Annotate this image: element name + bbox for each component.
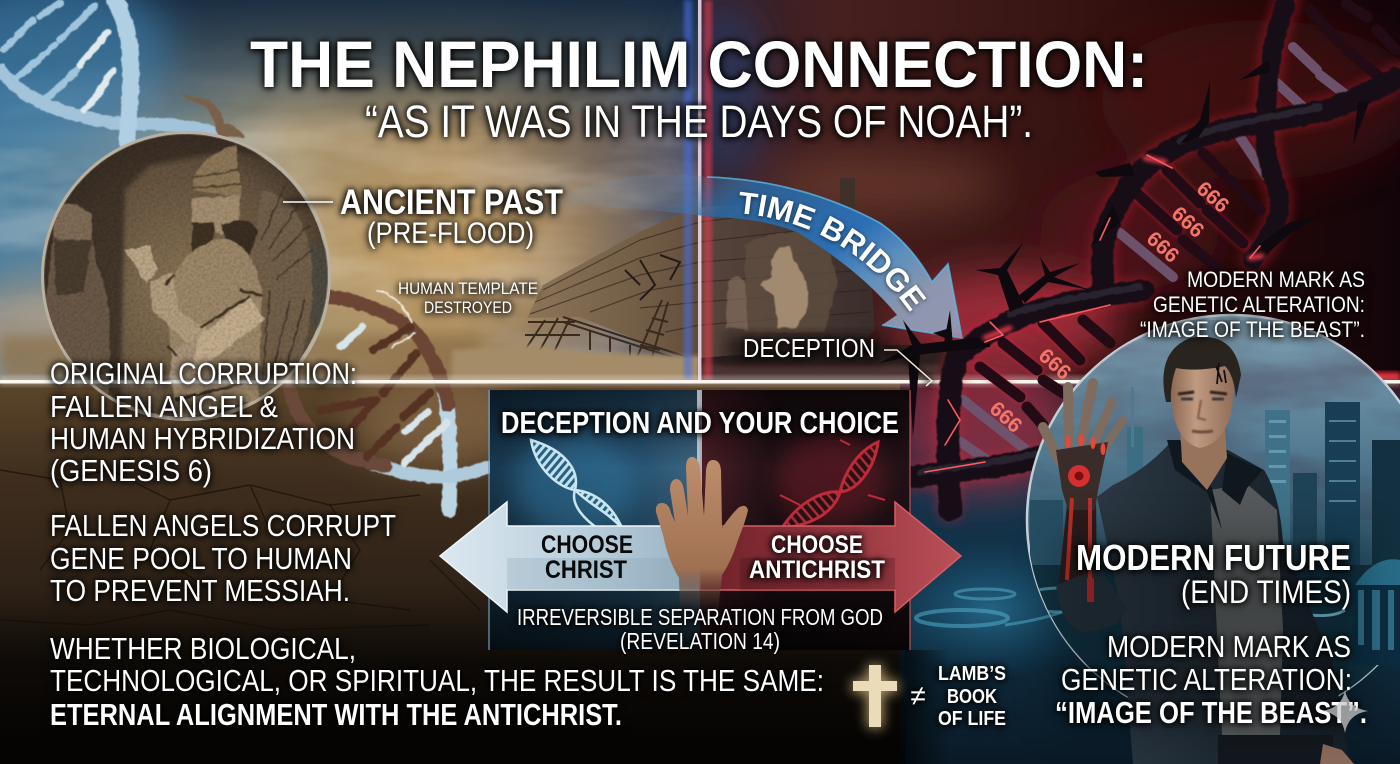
icon: raised hand xyxy=(656,457,748,612)
text block: eternal alignment xyxy=(50,631,824,732)
666 labels: 666 xyxy=(985,397,1026,438)
ark relief carving xyxy=(726,232,838,332)
label: modern mark top right: “IMAGE OF THE BEAST”. xyxy=(1140,317,1365,342)
forearm xyxy=(1058,495,1097,590)
thorns xyxy=(880,60,1370,437)
eyes, brows, nose and mouth xyxy=(1178,392,1227,432)
text block: fallen angels xyxy=(50,508,396,608)
666 labels: 666 xyxy=(1167,202,1208,243)
text block: original corruption: FALLEN ANGEL & xyxy=(50,389,278,424)
skyline buildings xyxy=(1030,387,1360,590)
cracked desert ground xyxy=(0,470,480,630)
red crack highlights xyxy=(925,155,1260,472)
not equal sign: ≠ xyxy=(910,680,926,711)
label: lamb's book of life: BOOK xyxy=(947,686,997,708)
text block: original corruption: (GENESIS 6) xyxy=(50,453,212,488)
label: modern mark top right xyxy=(1140,267,1365,342)
antichrist label: CHOOSE xyxy=(771,531,863,559)
label: human template destroyed: HUMAN TEMPLATE xyxy=(398,279,538,298)
subtitle: “AS IT WAS IN THE DAYS OF NOAH”. xyxy=(365,96,1033,147)
label: human template destroyed xyxy=(398,279,538,317)
horizontal divider line xyxy=(0,372,1400,386)
man with mark xyxy=(1043,337,1354,764)
text: irreversible separation xyxy=(517,604,883,654)
collar xyxy=(1167,440,1263,530)
text block: eternal alignment: ETERNAL ALIGNMENT WITH THE ANTICHRIST. xyxy=(50,697,622,732)
text block: modern mark bottom xyxy=(1055,629,1367,730)
antichrist label xyxy=(749,531,885,584)
center panel: deception and your choice xyxy=(488,390,911,650)
icon: glowing cross xyxy=(852,665,898,728)
text block: eternal alignment: TECHNOLOGICAL, OR SPIRITUAL, THE RESULT IS THE SAME: xyxy=(50,663,824,698)
666 labels: 666 xyxy=(1142,227,1183,268)
strand sheen xyxy=(920,107,1320,472)
christ label: CHRIST xyxy=(545,556,627,584)
text: irreversible separation: IRREVERSIBLE SEPARATION FROM GOD xyxy=(517,604,883,630)
label: deception: DECEPTION xyxy=(743,333,875,363)
strands xyxy=(913,6,1395,510)
title: THE NEPHILIM CONNECTION: xyxy=(250,27,1148,101)
horizon desert strip xyxy=(452,345,700,382)
heading: ancient past: (PRE-FLOOD) xyxy=(367,217,534,250)
bionic hand xyxy=(1043,383,1123,602)
choice arrow: Christ xyxy=(440,502,720,612)
sleeve xyxy=(1056,568,1128,632)
heading: modern future: (END TIMES) xyxy=(1181,574,1351,610)
hair xyxy=(1163,337,1241,402)
text block: eternal alignment: WHETHER BIOLOGICAL, xyxy=(50,631,356,666)
city lights outside circle xyxy=(916,440,1400,665)
heading: ancient past: ANCIENT PAST xyxy=(340,183,563,222)
ark scaffolding and ladder xyxy=(525,300,687,358)
text block: original corruption: ORIGINAL CORRUPTION: xyxy=(50,356,357,391)
jacket xyxy=(1097,445,1350,764)
red thorned DNA xyxy=(880,0,1400,510)
red dna icon xyxy=(780,440,885,528)
label: modern mark top right: GENETIC ALTERATION: xyxy=(1153,292,1365,317)
christ label: CHOOSE xyxy=(541,531,633,559)
sky cloud texture xyxy=(1030,320,1400,520)
relief: main figure xyxy=(125,145,264,420)
top-left DNA helix xyxy=(0,0,212,142)
label: lamb's book of life: LAMB’S xyxy=(938,663,1006,685)
t-shirt xyxy=(1210,484,1283,735)
label: lamb's book of life: OF LIFE xyxy=(938,708,1006,730)
ark cracks xyxy=(625,255,680,300)
text block: original corruption: HUMAN HYBRIDIZATION xyxy=(50,421,355,456)
choice arrow: Antichrist xyxy=(700,502,961,612)
icon: sparkle xyxy=(1322,690,1368,733)
neck xyxy=(1180,425,1227,490)
label: modern mark top right: MODERN MARK AS xyxy=(1187,267,1365,292)
center vertical divider xyxy=(684,0,712,381)
right horizon strip xyxy=(700,345,960,381)
blue dna icon xyxy=(531,440,622,530)
dark text backdrop, right lower xyxy=(1050,530,1370,730)
heading: modern future xyxy=(1076,537,1351,610)
label: deception xyxy=(743,333,932,386)
trousers xyxy=(1218,735,1333,764)
mark on forehead xyxy=(1216,363,1226,384)
strand glow xyxy=(913,0,1400,510)
rungs xyxy=(980,170,1243,397)
heading: ancient past xyxy=(283,183,563,250)
666 labels: 666 xyxy=(1034,344,1075,385)
666 labels: 666 xyxy=(1192,177,1233,218)
666 labels xyxy=(985,177,1233,438)
time bridge outer edge xyxy=(707,177,962,338)
text block: fallen angels: TO PREVENT MESSIAH. xyxy=(50,573,350,608)
dark band behind deception label xyxy=(725,335,885,363)
time bridge label: TIME BRIDGE xyxy=(738,190,928,314)
text block: modern mark bottom: GENETIC ALTERATION: xyxy=(1061,662,1352,697)
panel heading: deception and your choice: DECEPTION AND YOUR CHOICE xyxy=(501,405,899,440)
time bridge arrow xyxy=(562,174,963,339)
corrupted DNA helix xyxy=(290,290,500,510)
antichrist label: ANTICHRIST xyxy=(749,556,885,584)
ark xyxy=(525,178,875,358)
text block: fallen angels: GENE POOL TO HUMAN xyxy=(50,541,352,576)
christ label xyxy=(541,531,633,584)
ark mast xyxy=(840,178,855,213)
text: irreversible separation: (REVELATION 14) xyxy=(620,628,780,654)
relief: wing xyxy=(256,186,314,398)
circle: ancient relief xyxy=(40,130,340,420)
relief: left figure xyxy=(46,204,110,420)
text block: original corruption xyxy=(50,356,357,488)
relic claw on circle top xyxy=(181,94,244,138)
red cracks xyxy=(985,158,1262,338)
modern future circle portrait xyxy=(1020,315,1400,735)
heading: modern future: MODERN FUTURE xyxy=(1076,537,1351,578)
hand on lower right xyxy=(1320,744,1354,764)
label: human template destroyed: DESTROYED xyxy=(424,298,512,317)
text block: modern mark bottom: MODERN MARK AS xyxy=(1107,629,1351,664)
label: lamb's book of life xyxy=(938,663,1006,730)
head xyxy=(1170,342,1235,448)
text block: fallen angels: FALLEN ANGELS CORRUPT xyxy=(50,508,396,543)
hand implant xyxy=(1066,434,1106,602)
